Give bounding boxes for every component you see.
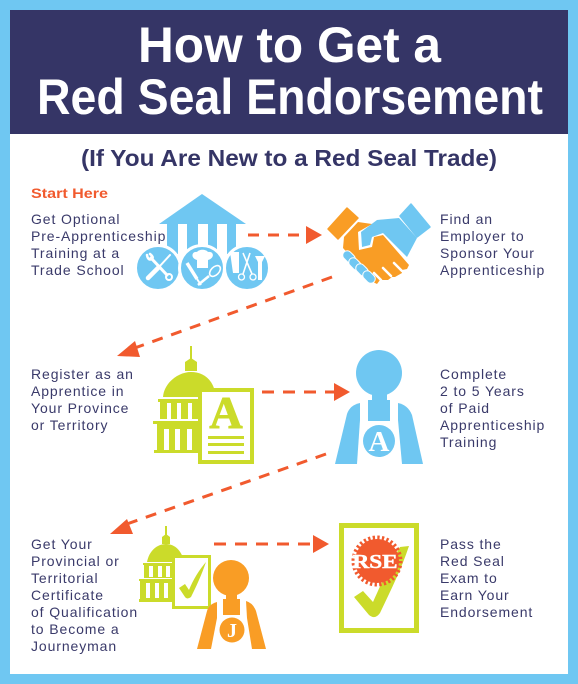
- step 4 text: 2 to 5 Years: [440, 383, 525, 399]
- icon: chef hat and whisk: [187, 250, 222, 285]
- icon: red seal exam certificate: RSE: [352, 551, 398, 573]
- step 1 text: Training at a: [31, 245, 120, 261]
- title banner: Red Seal Endorsement: [37, 69, 543, 125]
- title banner: [10, 10, 568, 134]
- step 4 text: Apprenticeship: [440, 417, 545, 433]
- step 5 text: Journeyman: [31, 638, 117, 654]
- arrow: training to certificate: [110, 454, 326, 534]
- step 6 text: Pass the: [440, 536, 502, 552]
- arrow: school to employer: [248, 226, 322, 244]
- step 3 text: or Territory: [31, 417, 108, 433]
- icon: red seal exam certificate: [342, 526, 416, 630]
- step 6 text: Earn Your: [440, 587, 510, 603]
- step 3 text: Register as an: [31, 366, 134, 382]
- icon: legislature and apprentice document: A: [209, 387, 243, 438]
- step 4 text: Training: [440, 434, 497, 450]
- step 6 text: Endorsement: [440, 604, 533, 620]
- arrow: employer to register: [117, 277, 332, 357]
- step 1 text: Trade School: [31, 262, 125, 278]
- icon: wrench and screwdriver: [147, 254, 172, 280]
- subtitle: (If You Are New to a Red Seal Trade): [81, 145, 497, 171]
- step 4 text: Complete: [440, 366, 507, 382]
- step 1 text: Pre-Apprenticeship: [31, 228, 166, 244]
- icon: apprentice figure: [335, 350, 423, 464]
- step 2 text: Sponsor Your: [440, 245, 535, 261]
- step 5 text: Certificate: [31, 587, 104, 603]
- step 5 text: to Become a: [31, 621, 120, 637]
- start here label: Start Here: [31, 185, 108, 201]
- step 4 text: of Paid: [440, 400, 490, 416]
- title banner: How to Get a: [138, 17, 442, 73]
- step 2 text: Employer to: [440, 228, 525, 244]
- step 6 text: Red Seal: [440, 553, 505, 569]
- step 3 text: Apprentice in: [31, 383, 124, 399]
- icon: legislature and apprentice document: [153, 346, 252, 462]
- icon: journeyman figure: J: [227, 620, 237, 642]
- step 2 text: Find an: [440, 211, 493, 227]
- icon: apprentice figure: A: [369, 426, 390, 458]
- icon: journeyman figure: [197, 560, 266, 649]
- arrow: register to training: [262, 383, 350, 401]
- icon: legislature and certificate: [139, 526, 210, 608]
- step 6 text: Exam to: [440, 570, 498, 586]
- step 5 text: Get Your: [31, 536, 93, 552]
- step 2 text: Apprenticeship: [440, 262, 545, 278]
- step 5 text: Provincial or: [31, 553, 120, 569]
- step 5 text: of Qualification: [31, 604, 138, 620]
- icon: handshake: [328, 204, 430, 285]
- seal burst: [354, 538, 400, 584]
- step 5 text: Territorial: [31, 570, 98, 586]
- step 1 text: Get Optional: [31, 211, 120, 227]
- arrow: certificate to exam: [214, 535, 329, 553]
- icon: trade school: [136, 194, 270, 290]
- icon: comb, scissors and bottle: [230, 252, 265, 280]
- step 3 text: Your Province: [31, 400, 129, 416]
